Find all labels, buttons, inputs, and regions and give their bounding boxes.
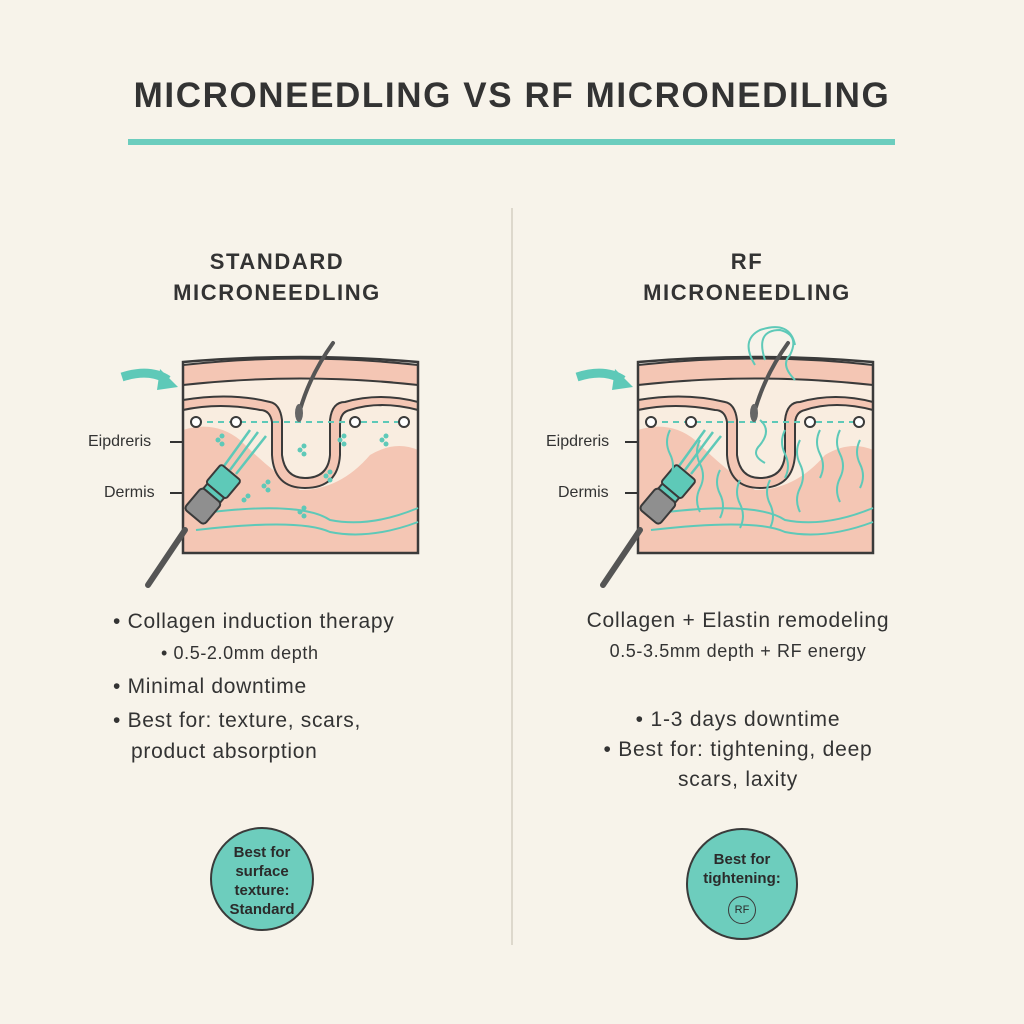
badge: standard: texture: xyxy=(234,882,290,899)
heading: standard xyxy=(173,249,381,305)
text block: standard: • Best for: texture, scars, xyxy=(113,709,361,732)
skin diagram: standard xyxy=(122,343,418,585)
text block: rf: • Best for: tightening, deep xyxy=(603,738,873,761)
heading: standard: MICRONEEDLING xyxy=(173,280,381,305)
text block: rf: scars, laxity xyxy=(678,768,798,791)
text block: standard xyxy=(113,610,394,763)
badge: standard: surface xyxy=(235,863,289,880)
badge: rf xyxy=(686,828,798,940)
text block: standard: product absorption xyxy=(131,740,318,763)
badge: standard: Standard xyxy=(229,901,294,918)
heading: rf: RF xyxy=(731,249,763,274)
icon: rf circle xyxy=(728,896,756,924)
title underline xyxy=(128,139,895,145)
text block: rf: • 1-3 days downtime xyxy=(636,708,840,731)
badge: rf: Best for xyxy=(714,851,770,868)
text block: rf: 0.5-3.5mm depth + RF energy xyxy=(610,641,866,661)
badge: standard xyxy=(210,827,314,931)
text: Dermis xyxy=(104,484,155,501)
text block: rf: Collagen + Elastin remodeling xyxy=(587,609,889,632)
text block: standard: • 0.5-2.0mm depth xyxy=(161,643,319,663)
heading: rf: MICRONEEDLING xyxy=(643,280,851,305)
text: Eipdreris xyxy=(546,433,609,450)
heading: standard: STANDARD xyxy=(210,249,344,274)
text block: rf xyxy=(587,609,889,791)
heading: rf xyxy=(643,249,851,305)
labels: Eipdreris xyxy=(88,433,151,450)
title: MICRONEEDLING VS RF MICRONEDILING xyxy=(134,76,890,115)
text block: standard: • Minimal downtime xyxy=(113,675,307,698)
badge: standard: Best for xyxy=(234,844,290,861)
text: Dermis xyxy=(558,484,609,501)
skin diagram: rf xyxy=(577,327,873,585)
text block: standard: • Collagen induction therapy xyxy=(113,610,394,633)
icon: rf circle: RF xyxy=(735,904,749,916)
badge: rf: tightening: xyxy=(703,870,781,887)
divider xyxy=(511,208,513,945)
